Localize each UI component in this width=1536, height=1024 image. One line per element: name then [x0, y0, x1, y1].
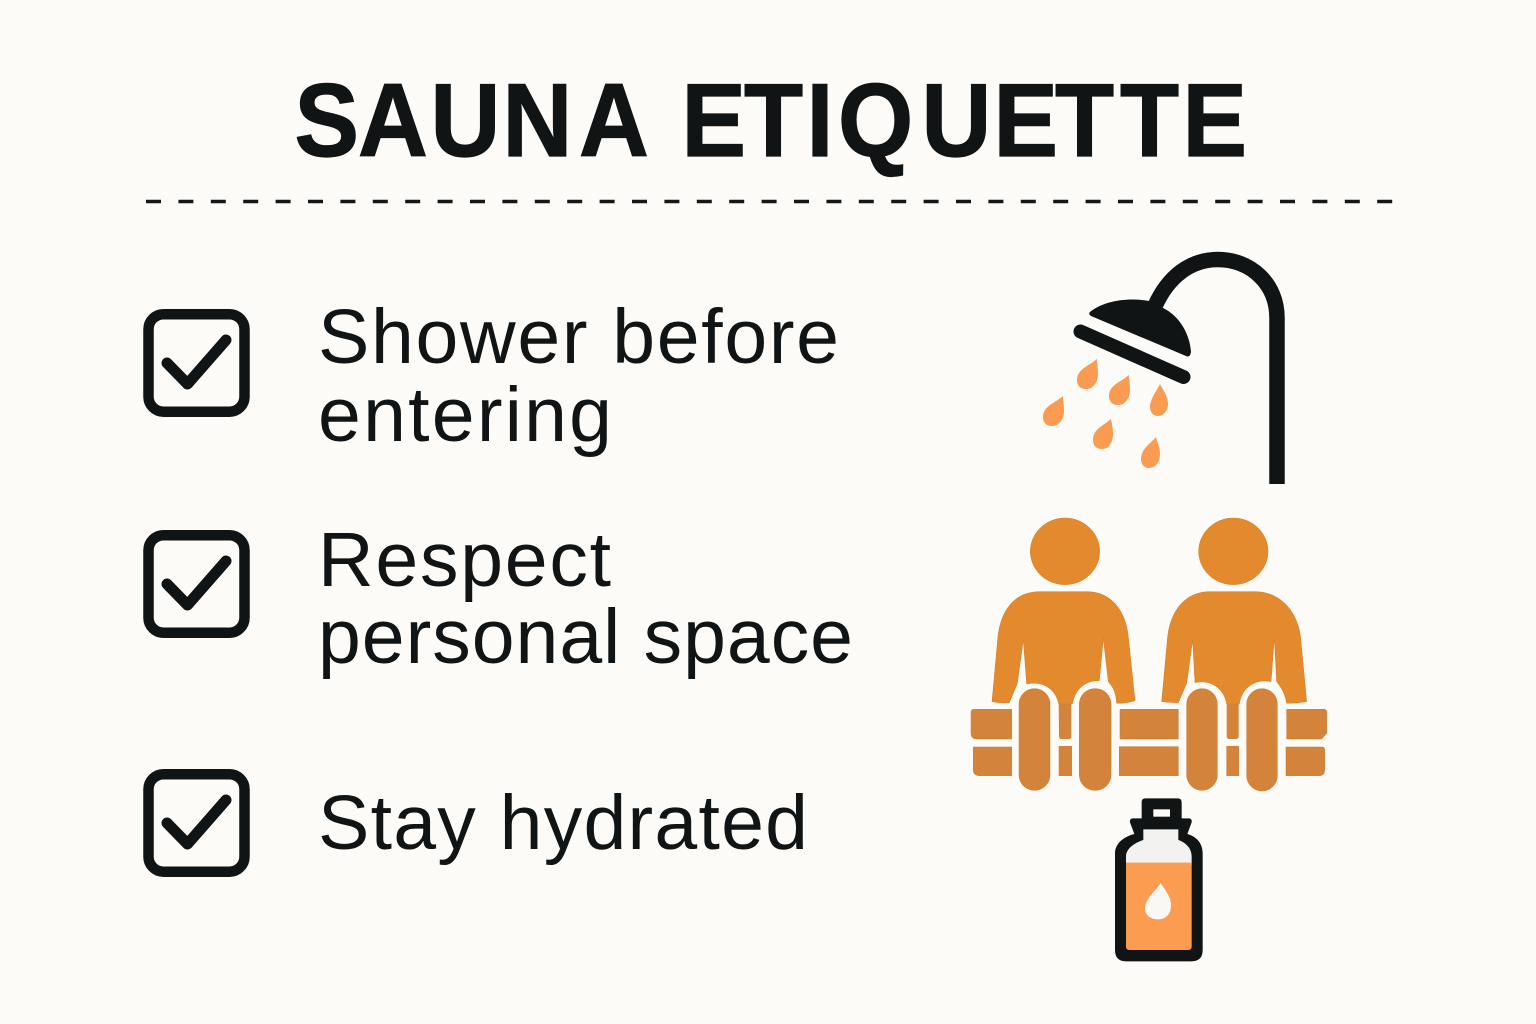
white drop	[1145, 883, 1171, 919]
shower head	[1089, 299, 1191, 356]
icon: checkbox 2	[148, 535, 244, 633]
person 2 upper body	[1162, 592, 1307, 704]
checklist item: personal space	[148, 517, 853, 680]
text: stay hydrated: Stay hydrated	[318, 780, 808, 866]
text: respect personal space: personal space	[318, 594, 853, 680]
text: shower before entering: entering	[318, 372, 612, 458]
person 2 legs	[1187, 689, 1277, 791]
person 1 head	[1030, 518, 1100, 585]
bottle liquid	[1126, 863, 1192, 950]
shower pipe	[1155, 260, 1277, 484]
checklist item: shower	[148, 294, 839, 458]
person 2 head	[1199, 518, 1268, 585]
person 1 upper body	[992, 592, 1135, 704]
person 2 lower torso	[1227, 702, 1239, 739]
checklist item: hydrated	[148, 774, 808, 872]
shower plate	[1080, 332, 1184, 377]
bottle empty space	[1126, 829, 1192, 865]
icon: checkbox 1	[148, 314, 244, 412]
title: SAUNA ETIQUETTE	[295, 63, 1247, 179]
person 2	[1162, 518, 1307, 791]
icon: shower	[1043, 260, 1277, 484]
icon: water bottle	[1115, 798, 1203, 961]
person 1 legs	[1019, 689, 1111, 790]
icon: checkbox 3	[148, 774, 244, 872]
text: respect personal space: Respect	[318, 517, 611, 603]
bottle outline	[1115, 798, 1203, 961]
person 1	[992, 518, 1135, 790]
person 1 lower torso	[1059, 702, 1071, 739]
text: shower before entering: Shower before	[318, 294, 839, 380]
bench planks	[971, 709, 1327, 776]
icon: two people sitting on a bench	[971, 518, 1327, 791]
water drops	[1043, 359, 1168, 468]
cap opening	[1153, 809, 1170, 817]
